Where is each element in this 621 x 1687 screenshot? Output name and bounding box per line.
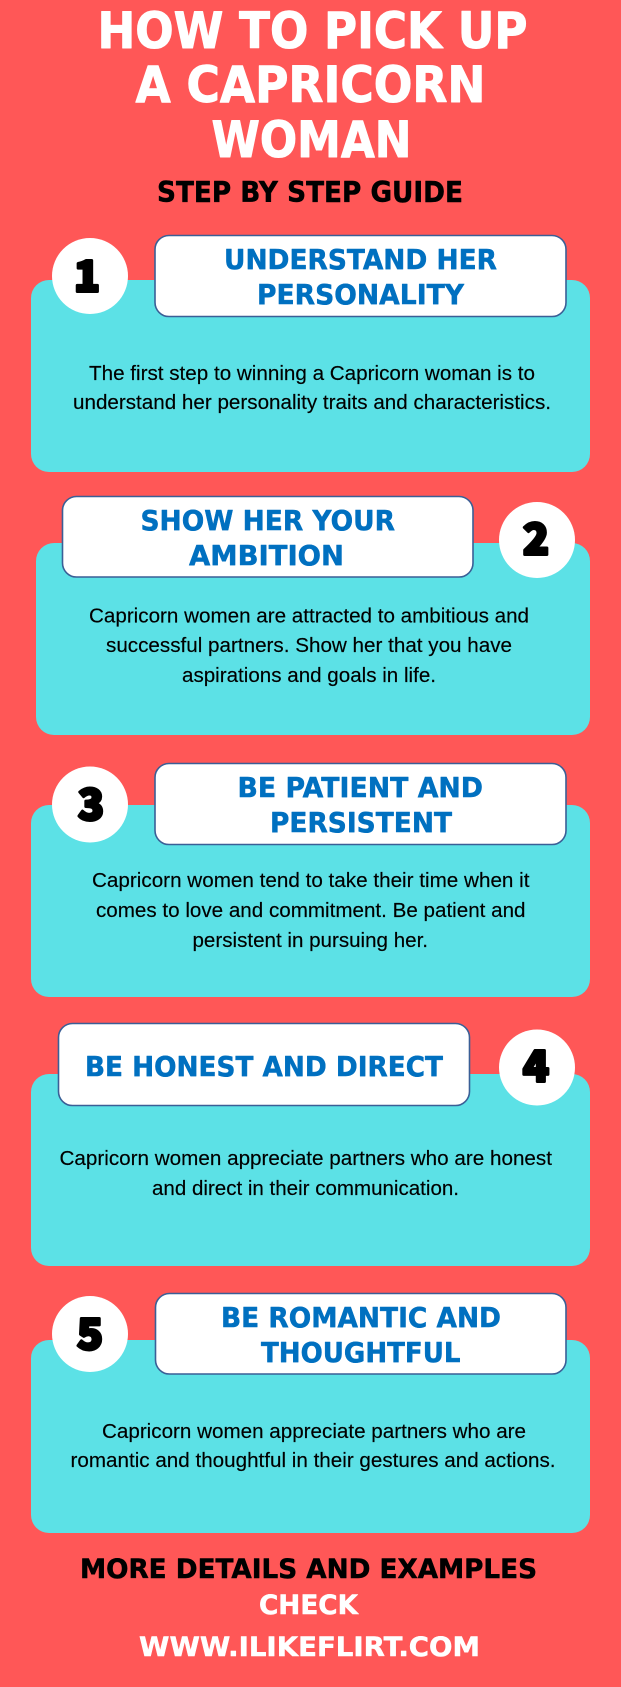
step heading box: BE PATIENT AND [238,772,483,804]
step text [89,606,529,687]
panel background [31,280,590,472]
step text: comes to love and commitment. Be patient and [96,900,526,922]
step text: successful partners. Show her that you have [106,635,512,657]
panel background [31,1340,590,1533]
step text: Capricorn women are attracted to ambitious and [89,606,529,628]
panel: step 3 [31,764,590,997]
step text: The first step to winning a Capricorn woman is to [89,363,535,385]
step heading box: BE HONEST AND DIRECT [85,1051,443,1083]
step text: aspirations and goals in life. [182,665,436,687]
step text: persistent in pursuing her. [192,930,428,952]
number badge 3: 3 [78,771,104,833]
step heading box: UNDERSTAND HER [224,244,497,276]
panel background [31,805,590,997]
step heading box [156,1294,566,1374]
number badge 3 [52,766,128,842]
title: A CAPRICORN [136,56,486,114]
step heading box: BE ROMANTIC AND [221,1302,501,1334]
panel background [36,543,590,735]
panel: step 4 [31,1024,590,1266]
number badge 1: 1 [74,242,100,304]
step heading box [62,496,473,577]
footer call to action: CHECK [259,1590,359,1621]
number badge 5: 5 [77,1300,103,1362]
number badge 2: 2 [523,506,549,568]
step text: and direct in their communication. [152,1178,459,1200]
number badge 1 [52,238,128,314]
panel: step 1 [31,236,590,472]
subtitle: STEP BY STEP GUIDE [157,176,463,209]
step text [92,870,530,952]
step heading box [155,236,566,316]
panel background [31,1074,590,1266]
title: HOW TO PICK UP [98,2,528,60]
step heading box: SHOW HER YOUR [140,505,395,537]
step heading box: THOUGHTFUL [261,1337,460,1369]
number badge 4: 4 [523,1032,549,1094]
number badge 4 [499,1030,575,1106]
step heading box: PERSISTENT [270,807,452,839]
step text [70,1421,556,1472]
step text: Capricorn women tend to take their time when it [92,870,530,892]
step text [60,1148,552,1200]
footer call to action: WWW.ILIKEFLIRT.COM [139,1632,480,1663]
title [98,2,528,169]
title: WOMAN [212,111,412,169]
step text: Capricorn women appreciate partners who are [102,1421,526,1443]
step heading box [155,764,566,844]
step text [73,363,551,414]
step heading box: PERSONALITY [257,279,465,311]
step heading box [58,1024,470,1106]
step text: understand her personality traits and characteristics. [73,392,551,414]
number badge 5 [52,1296,128,1372]
step text: romantic and thoughtful in their gestures and actions. [70,1450,556,1472]
step text: Capricorn women appreciate partners who are honest [60,1148,552,1170]
step heading box: AMBITION [189,540,344,572]
footer call to action: MORE DETAILS AND EXAMPLES [80,1554,537,1585]
panel: step 2 [36,496,590,735]
footer call to action [80,1554,537,1663]
number badge 2 [499,502,575,578]
panel: step 5 [31,1294,590,1533]
